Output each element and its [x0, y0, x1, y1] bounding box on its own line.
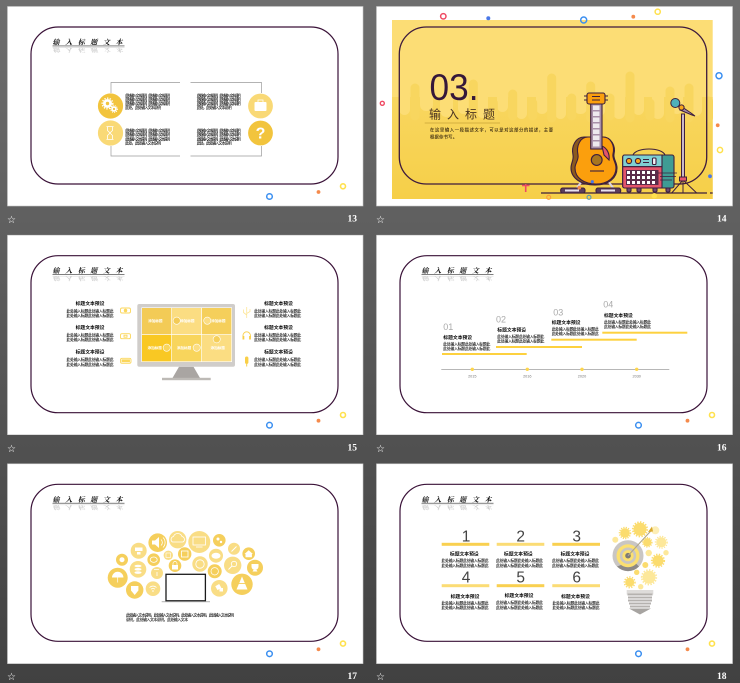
- numbered grid item 3: 此处输入标题此处输入标题此: [552, 563, 599, 568]
- numbered grid item 3: 标题文本预设: [561, 550, 590, 558]
- slide 13 footer: [7, 214, 357, 226]
- left text items: 此处输入标题此处输入标题此: [66, 332, 114, 338]
- numbered grid item 4: [442, 570, 489, 610]
- text block: top right: 此处输入文本说明，此处输入文本说明: [197, 101, 241, 106]
- right text items: 标题文本预设: [264, 349, 293, 356]
- description: [430, 126, 554, 140]
- numbered grid item 4: 4: [462, 570, 471, 586]
- text block: bottom right: 此处输入文本说明，此处输入文本说明: [197, 132, 241, 137]
- slide 16: 输入标题文本: [422, 275, 497, 282]
- left text items: [66, 300, 114, 367]
- icon: question mark: ?: [256, 126, 265, 142]
- timeline step 02: 此处输入标题此处输入标题此: [497, 339, 545, 344]
- text block: top right: 此处，此处输入文本说明: [197, 105, 232, 110]
- left text items: 此处输入标题此处输入标题此: [66, 313, 114, 318]
- numbered grid item 6: [552, 570, 600, 610]
- numbered grid item 5: 此处输入标题此处输入标题此: [496, 605, 543, 610]
- slide 16: 输入标题文本: [422, 266, 497, 275]
- slide 13 diagram: four circles with connectors and text: [98, 82, 273, 156]
- timeline step 01: [442, 322, 527, 355]
- timeline axis: 2016: [523, 374, 532, 378]
- monitor with puzzle: 添加标题: [211, 345, 225, 350]
- numbered grid item 2: 2: [516, 528, 525, 546]
- text block: top right: [197, 93, 241, 110]
- text block: bottom right: 此处输入文本说明，此处输入文本说明: [197, 136, 241, 141]
- slide 14 footer: [376, 214, 727, 226]
- timeline step 03: 此处输入标题此处输入标题此: [552, 331, 599, 336]
- description: 根据你书写。: [430, 134, 457, 140]
- numbered grid item 1: 此处输入标题此处输入标题此: [442, 563, 489, 568]
- timeline step 04: 标题文本预设: [604, 312, 633, 319]
- icon: guitar: [561, 93, 621, 193]
- numbered grid item 3: 3: [572, 528, 581, 546]
- right text items: 此处输入标题此处输入标题此: [254, 357, 301, 362]
- numbered grid item 3: [552, 528, 600, 568]
- slide 15: 输入标题文本: [52, 275, 128, 282]
- right text items: 此处输入标题此处输入标题此: [254, 308, 301, 314]
- text block: top left: 此处输入文本说明，此处输入文本说明: [125, 101, 170, 106]
- timeline axis: 2030: [632, 374, 641, 378]
- left text items: 标题文本预设: [76, 349, 105, 356]
- text block: bottom left: 此处，此处输入文本说明: [125, 140, 161, 145]
- ground line: [541, 192, 713, 194]
- timeline step 04: 此处输入标题此处输入标题此: [604, 324, 651, 329]
- timeline step 02: 标题文本预设: [497, 326, 526, 334]
- slide 18: [376, 464, 732, 664]
- icon bubble cloud: [108, 531, 263, 602]
- slide 17 footer: ☆: [7, 672, 16, 683]
- text block: bottom right: [197, 128, 241, 145]
- text block: top left: 此处输入文本说明，此处输入文本说明: [125, 97, 170, 102]
- numbered grid item 1: 此处输入标题此处输入标题此: [442, 558, 489, 563]
- text block: bottom right: 此处输入文本说明，此处输入文本说明: [197, 128, 241, 133]
- numbered grid item 4: 此处输入标题此处输入标题此: [442, 605, 489, 610]
- slide 16 footer: ☆: [376, 444, 385, 455]
- section number: 03.: [430, 67, 478, 108]
- left text items: 标题文本预设: [76, 300, 105, 307]
- slide 16 footer: [376, 444, 727, 455]
- slide 13: 输入标题文本: [52, 46, 128, 53]
- slide 15 footer: ☆: [7, 444, 16, 455]
- slide 14 footer: ☆: [376, 215, 385, 226]
- slide 18: 输入标题文本: [422, 504, 497, 511]
- text block: bottom left: 此处输入文本说明，此处输入文本说明: [125, 132, 170, 137]
- right text items: 此处输入标题此处输入标题此: [254, 332, 301, 338]
- text block: bottom left: [125, 128, 170, 145]
- text block: top left: 此处输入文本说明，此处输入文本说明: [125, 93, 170, 98]
- timeline step 03: 标题文本预设: [552, 319, 581, 326]
- numbered grid item 6: 此处输入标题此处输入标题此: [552, 600, 600, 605]
- text block: top right: 此处输入文本说明，此处输入文本说明: [197, 93, 241, 98]
- left text items: 标题文本预设: [76, 324, 105, 331]
- text block: top left: [125, 93, 170, 110]
- timeline axis: 2020: [578, 374, 586, 378]
- slide 16: [376, 235, 732, 435]
- confetti dots: [380, 9, 723, 199]
- right text items: [254, 300, 301, 367]
- icon: light bulb of gears with target: [612, 522, 669, 614]
- timeline step 02: 此处输入标题此处输入标题此: [497, 334, 545, 339]
- caption text: 说明，此处输入文本说明，此处输入文本: [126, 617, 188, 622]
- slide 15: [8, 235, 363, 435]
- numbered grid item 5: [496, 570, 544, 610]
- icon: gears: [102, 98, 117, 112]
- slide 18: 输入标题文本: [422, 495, 497, 504]
- left text items: 此处输入标题此处输入标题此: [66, 357, 114, 362]
- left text items: 此处输入标题此处输入标题此: [66, 308, 114, 314]
- numbered grid item 3: 此处输入标题此处输入标题此: [552, 558, 599, 563]
- timeline step 03: 03: [553, 308, 563, 318]
- text block: bottom left: 此处输入文本说明，此处输入文本说明: [125, 128, 170, 133]
- slide 13 footer: 13: [348, 214, 357, 224]
- numbered grid item 2: 此处输入标题此处输入标题此: [496, 558, 543, 563]
- description: 在这里输入一段描述文字，可以是对这部分的描述，主要: [430, 126, 554, 134]
- slide 15: 输入标题文本: [52, 266, 128, 275]
- numbered grid item 6: 此处输入标题此处输入标题此: [552, 605, 600, 610]
- icon: amplifier: [623, 149, 677, 192]
- slide 18 footer: 18: [717, 672, 727, 682]
- numbered grid item 2: [496, 528, 544, 568]
- left text items: 此处输入标题此处输入标题此: [66, 337, 114, 342]
- timeline step 01: 此处输入标题此处输入标题此: [443, 346, 491, 351]
- slide 15 footer: [7, 444, 357, 455]
- monitor with puzzle: 添加标题: [177, 345, 192, 350]
- white bubble glyphs: [112, 533, 258, 595]
- caption text: 此处输入文本说明，此处输入文本说明。此处输入文本说明，此处输入文本说明: [126, 612, 234, 618]
- caption text: [126, 612, 234, 622]
- monitor with puzzle: 添加标题: [148, 318, 163, 323]
- text block: bottom right: 此处，此处输入文本说明: [197, 140, 232, 145]
- timeline axis: 2015: [468, 374, 477, 378]
- numbered grid item 6: 6: [572, 570, 581, 586]
- icon: suitcase: [254, 100, 266, 111]
- slide 14: [376, 6, 732, 206]
- numbered grid item 5: 此处输入标题此处输入标题此: [496, 600, 543, 605]
- monitor with puzzle: 添加标题: [148, 345, 162, 350]
- slide 13 footer: ☆: [7, 215, 16, 226]
- numbered grid item 2: 标题文本预设: [504, 550, 533, 558]
- slide 13: 输入标题文本: [52, 38, 128, 46]
- numbered grid item 6: 标题文本预设: [561, 593, 590, 600]
- slide 13: [8, 6, 363, 206]
- timeline step 01: 标题文本预设: [443, 334, 472, 341]
- right text items: 此处输入标题此处输入标题此: [254, 313, 301, 318]
- numbered grid item 1: 标题文本预设: [450, 550, 479, 558]
- left text items: 此处输入标题此处输入标题此: [66, 362, 114, 367]
- timeline step 03: [551, 308, 637, 341]
- slide 16 footer: 16: [717, 444, 727, 454]
- text block: top right: 此处输入文本说明，此处输入文本说明: [197, 97, 241, 102]
- timeline step 04: 此处输入标题此处输入标题此: [604, 320, 651, 324]
- monitor with puzzle: 添加标题: [211, 318, 226, 323]
- gears: [612, 522, 669, 589]
- numbered grid item 5: 5: [516, 570, 525, 586]
- numbered grid item 1: [442, 528, 489, 568]
- slide 18 footer: ☆: [376, 672, 385, 683]
- timeline step 02: [496, 314, 582, 348]
- slide 17: 输入标题文本: [52, 504, 128, 511]
- right text items: 标题文本预设: [264, 300, 293, 307]
- numbered grid item 4: 标题文本预设: [451, 593, 480, 600]
- numbered grid item 1: 1: [462, 528, 470, 546]
- slide 15 footer: 15: [348, 444, 357, 454]
- icon: hourglass: [106, 126, 114, 140]
- slide 18 footer: [376, 672, 727, 683]
- slide 17: 输入标题文本: [52, 495, 128, 504]
- laptop: [162, 574, 210, 602]
- timeline axis: [441, 368, 669, 378]
- rounded frame: [399, 27, 707, 184]
- numbered grid item 5: 标题文本预设: [505, 592, 534, 599]
- slide 17 footer: 17: [348, 672, 357, 682]
- slide 17: [8, 464, 363, 664]
- section title: 输入标题: [429, 106, 501, 122]
- text block: bottom left: 此处输入文本说明，此处输入文本说明: [125, 136, 170, 141]
- right text items: 此处输入标题此处输入标题此: [254, 337, 301, 342]
- timeline step 02: 02: [496, 314, 506, 324]
- timeline step 01: 01: [443, 322, 453, 332]
- slide 17 footer: [7, 672, 357, 683]
- slide 14 footer: 14: [717, 214, 727, 224]
- target with arrow: [612, 526, 653, 571]
- timeline step 01: 此处输入标题此处输入标题此: [443, 342, 491, 346]
- right text items: 标题文本预设: [264, 324, 293, 331]
- yellow poster background: [392, 20, 713, 199]
- monitor with puzzle: 添加标题: [180, 318, 195, 323]
- numbered grid item 4: 此处输入标题此处输入标题此: [442, 600, 489, 605]
- timeline step 04: [602, 300, 687, 334]
- bulb base: [627, 590, 653, 614]
- right text items: 此处输入标题此处输入标题此: [254, 362, 301, 367]
- numbered grid item 2: 此处输入标题此处输入标题此: [496, 563, 543, 568]
- timeline step 03: 此处输入标题此处输入标题此: [552, 326, 599, 332]
- timeline step 04: 04: [603, 300, 613, 310]
- text block: top left: 此处，此处输入文本说明: [125, 105, 161, 110]
- left icons: [120, 308, 131, 363]
- icon: microphone on stand: [671, 98, 697, 193]
- monitor with puzzle: [137, 304, 235, 380]
- right icons: usb, headphones, microphone: [242, 307, 251, 366]
